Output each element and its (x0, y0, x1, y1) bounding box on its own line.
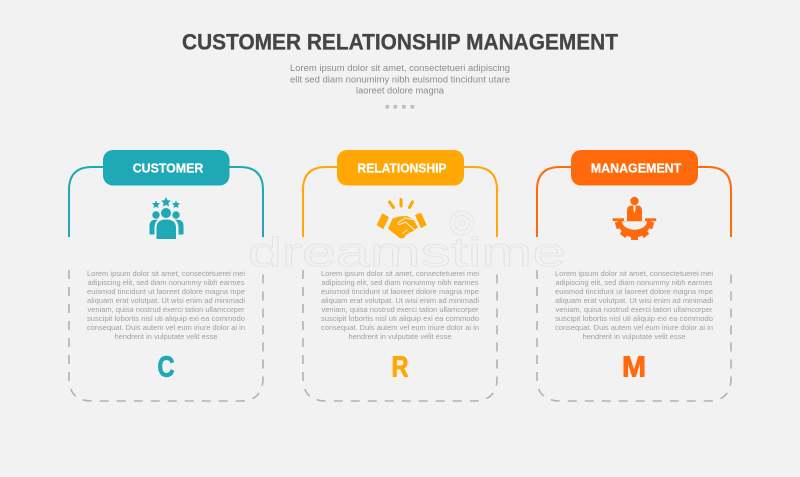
body text: suscipit lobortis nisl uti aliquip exi ea commodo (87, 314, 245, 323)
subtitle text block: laoreet dolore magna (356, 85, 445, 95)
body text: aliquam erat volutpat. Ut wisi enim ad minimadi (87, 296, 245, 305)
body text: consequat. Duis autem vel eum iriure dolor ai in (87, 323, 245, 332)
body text: aliquam erat volutpat. Ut wisi enim ad minimadi (321, 296, 479, 305)
body text: veniam, quisa nostrud exerci tation ullamcorper (88, 305, 245, 314)
body text: consequat. Duis autem vel eum iriure dolor ai in (555, 323, 713, 332)
letter M: M (622, 352, 646, 384)
heading pill: RELATIONSHIP (358, 160, 447, 176)
body text: Lorem ipsum dolor sit amet, consectetuerei mei (555, 269, 713, 278)
panel: customer (69, 150, 263, 401)
body text (87, 269, 245, 341)
title: CUSTOMER RELATIONSHIP MANAGEMENT (182, 30, 619, 54)
letter C: C (158, 352, 175, 384)
body text (321, 269, 479, 341)
body text: Lorem ipsum dolor sit amet, consectetuerei mei (87, 269, 245, 278)
body text: hendrerit in vulputate velit esse (348, 332, 452, 341)
letter R: R (392, 352, 409, 384)
subtitle text block: Lorem ipsum dolor sit amet, consectetueri adipiscing (290, 63, 510, 73)
body text: hendrerit in vulputate velit esse (114, 332, 218, 341)
heading pill (337, 150, 464, 186)
heading pill (571, 150, 698, 186)
body text: veniam, quisa nostrud exerci tation ullamcorper (322, 305, 479, 314)
body text: Lorem ipsum dolor sit amet, consectetuerei mei (321, 269, 479, 278)
body text: adipiscing elit, sed diam nonummy nibh earmes (88, 278, 245, 287)
panel: relationship (303, 150, 497, 401)
heading pill: MANAGEMENT (591, 160, 681, 176)
body text: euismod tincidunt ut laoreet dolore magna mpe (321, 287, 479, 296)
bracket outline (303, 167, 497, 237)
body text: adipiscing elit, sed diam nonummy nibh earmes (322, 278, 479, 287)
dashed lower frame (303, 270, 497, 401)
watermark: dreamstime (248, 229, 566, 275)
body text: suscipit lobortis nisl uti aliquip exi ea commodo (555, 314, 713, 323)
subtitle text block: elit sed diam nonumimy nibh euismod tincidunt utare (290, 74, 510, 84)
panel: management (537, 150, 731, 401)
icon: manager on gear (613, 197, 656, 240)
dashed lower frame (69, 270, 263, 401)
watermark (248, 211, 566, 275)
pagination dots (386, 105, 414, 109)
body text: hendrerit in vulputate velit esse (582, 332, 686, 341)
subtitle text block (290, 63, 510, 95)
heading pill: CUSTOMER (133, 160, 204, 176)
heading pill (103, 150, 230, 186)
body text: adipiscing elit, sed diam nonummy nibh earmes (556, 278, 713, 287)
body text: suscipit lobortis nisl uti aliquip exi ea commodo (321, 314, 479, 323)
bracket outline (69, 167, 263, 237)
dashed lower frame (537, 270, 731, 401)
body text: euismod tincidunt ut laoreet dolore magna mpe (87, 287, 245, 296)
icon: customers with stars (150, 197, 184, 239)
body text: aliquam erat volutpat. Ut wisi enim ad minimadi (555, 296, 713, 305)
body text: euismod tincidunt ut laoreet dolore magna mpe (555, 287, 713, 296)
body text (555, 269, 713, 341)
body text: veniam, quisa nostrud exerci tation ullamcorper (556, 305, 713, 314)
body text: consequat. Duis autem vel eum iriure dolor ai in (321, 323, 479, 332)
bracket outline (537, 167, 731, 237)
icon: handshake (377, 200, 427, 238)
